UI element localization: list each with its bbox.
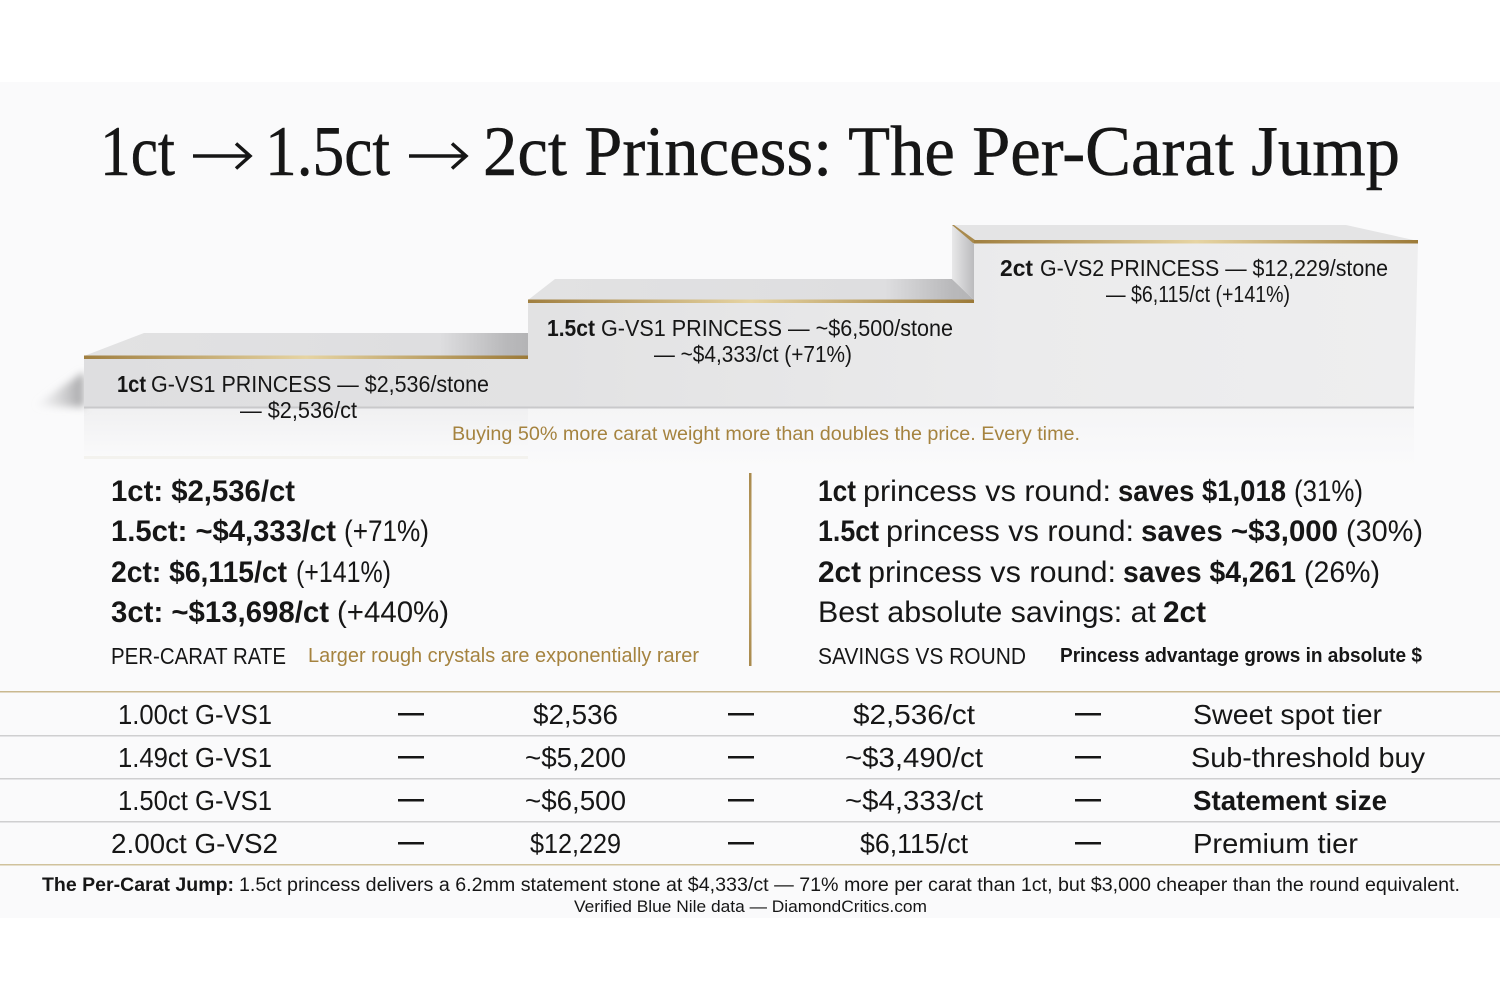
row: 1.49ct: 1.49ct G-VS1 bbox=[118, 742, 272, 773]
row: 1.50ct: ~$6,500 bbox=[525, 785, 626, 816]
row: 1.00ct: $2,536 bbox=[533, 699, 618, 730]
panel divider bbox=[749, 473, 752, 666]
step label: 2ct: 2ct bbox=[1000, 255, 1033, 281]
row: 1.49ct: Sub-threshold buy bbox=[1191, 742, 1425, 773]
row: 1.00ct: 1.00ct G-VS1 bbox=[118, 699, 272, 730]
gold tagline: Buying 50% more carat weight more than doubles the price. Every time. bbox=[452, 424, 1080, 445]
step label: 1.5ct: G-VS1 PRINCESS — ~$6,500/stone bbox=[601, 315, 953, 341]
footer summary: The Per-Carat Jump: bbox=[42, 875, 234, 896]
panel: savings vs round: SAVINGS VS ROUND bbox=[818, 643, 1026, 669]
panel: savings vs round: 2ct bbox=[1163, 596, 1206, 629]
table rules bbox=[0, 691, 1500, 866]
row: 1.49ct: ~$5,200 bbox=[525, 742, 626, 773]
panel: savings vs round: princess vs round: bbox=[886, 515, 1134, 548]
row: 1.00ct: Sweet spot tier bbox=[1193, 699, 1382, 730]
row: 2.00ct: 2.00ct G-VS2 bbox=[111, 828, 278, 859]
panel: savings vs round: (30%) bbox=[1346, 515, 1423, 548]
step 1: 1ct bbox=[84, 333, 528, 359]
step label: 1.5ct bbox=[547, 315, 953, 367]
panel: savings vs round: saves $4,261 bbox=[1123, 556, 1296, 589]
panel: savings vs round: saves $1,018 bbox=[1118, 475, 1286, 508]
panel: per-carat rate: 3ct: ~$13,698/ct bbox=[111, 596, 329, 629]
panel: per-carat rate: (+141%) bbox=[296, 556, 391, 589]
panel: savings vs round: saves ~$3,000 bbox=[1141, 515, 1338, 548]
arrow: 1ct to 1.5ct bbox=[193, 144, 250, 168]
row: 2.00ct: $12,229 bbox=[530, 828, 621, 859]
panel: savings vs round bbox=[818, 475, 1423, 669]
row: 2.00ct: Premium tier bbox=[1193, 828, 1358, 859]
panel: per-carat rate: 1.5ct: ~$4,333/ct bbox=[111, 515, 336, 548]
step label: 1.5ct: 1.5ct bbox=[547, 315, 595, 341]
panel: savings vs round: Best absolute savings: at bbox=[818, 596, 1157, 629]
panel: per-carat rate: Larger rough crystals are exponentially rarer bbox=[308, 645, 699, 667]
step label: 2ct bbox=[1000, 255, 1388, 307]
panel: savings vs round: (26%) bbox=[1304, 556, 1380, 589]
panel: savings vs round: 2ct bbox=[818, 556, 861, 589]
panel: savings vs round: princess vs round: bbox=[863, 475, 1111, 508]
step 2: 1.5ct bbox=[528, 279, 974, 303]
row: 1.50ct: Statement size bbox=[1193, 785, 1387, 816]
staircase podium bbox=[34, 225, 1418, 468]
step label: 2ct: — $6,115/ct (+141%) bbox=[1106, 281, 1290, 307]
arrow: 1.5ct to 2ct bbox=[409, 144, 466, 168]
comparison table bbox=[0, 691, 1500, 866]
floor reflection bbox=[84, 408, 1414, 468]
panel: per-carat rate: 1ct: $2,536/ct bbox=[111, 475, 295, 508]
title bbox=[100, 113, 1400, 191]
title: 1.5ct bbox=[265, 113, 390, 191]
panel: savings vs round: Princess advantage grows in absolute $ bbox=[1060, 645, 1422, 667]
footer summary: 1.5ct princess delivers a 6.2mm statement stone at $4,333/ct — 71% more per carat than 1ct, but $3,000 cheaper than the round equivalent. bbox=[239, 875, 1460, 896]
step label: 2ct: G-VS2 PRINCESS — $12,229/stone bbox=[1040, 255, 1388, 281]
step label: 1.5ct: — ~$4,333/ct (+71%) bbox=[654, 341, 852, 367]
panel: savings vs round: (31%) bbox=[1294, 475, 1363, 508]
panel: per-carat rate bbox=[111, 475, 699, 669]
row: 1.00ct: $2,536/ct bbox=[853, 699, 975, 730]
podium front bbox=[84, 243, 1418, 408]
title: 2ct Princess: The Per-Carat Jump bbox=[483, 113, 1400, 191]
step 3: 2ct bbox=[952, 225, 1418, 300]
panel: per-carat rate: (+71%) bbox=[344, 515, 429, 548]
row: 1.50ct: ~$4,333/ct bbox=[845, 785, 983, 816]
panel: savings vs round: 1ct bbox=[818, 475, 856, 508]
row: 1.50ct: 1.50ct G-VS1 bbox=[118, 785, 272, 816]
row: 2.00ct: $6,115/ct bbox=[860, 828, 968, 859]
panel: per-carat rate: (+440%) bbox=[337, 596, 449, 629]
row: 2.00ct bbox=[111, 828, 1358, 859]
panel: per-carat rate: PER-CARAT RATE bbox=[111, 643, 286, 669]
row: 1.49ct bbox=[118, 742, 1425, 773]
step label: 1ct bbox=[117, 371, 489, 423]
panel: savings vs round: 1.5ct bbox=[818, 515, 879, 548]
panel: per-carat rate: 2ct: $6,115/ct bbox=[111, 556, 287, 589]
row: 1.49ct: ~$3,490/ct bbox=[845, 742, 983, 773]
step label: 1ct: — $2,536/ct bbox=[240, 397, 358, 423]
title: 1ct bbox=[100, 113, 175, 191]
source credit: Verified Blue Nile data — DiamondCritics.com bbox=[574, 897, 927, 916]
row: 1.50ct bbox=[118, 785, 1387, 816]
left cast shadow bbox=[34, 372, 84, 407]
step label: 1ct: G-VS1 PRINCESS — $2,536/stone bbox=[151, 371, 489, 397]
step label: 1ct: 1ct bbox=[117, 371, 146, 397]
row: 1.00ct bbox=[118, 699, 1382, 730]
panel: savings vs round: princess vs round: bbox=[868, 556, 1116, 589]
podium base line bbox=[84, 406, 1414, 408]
